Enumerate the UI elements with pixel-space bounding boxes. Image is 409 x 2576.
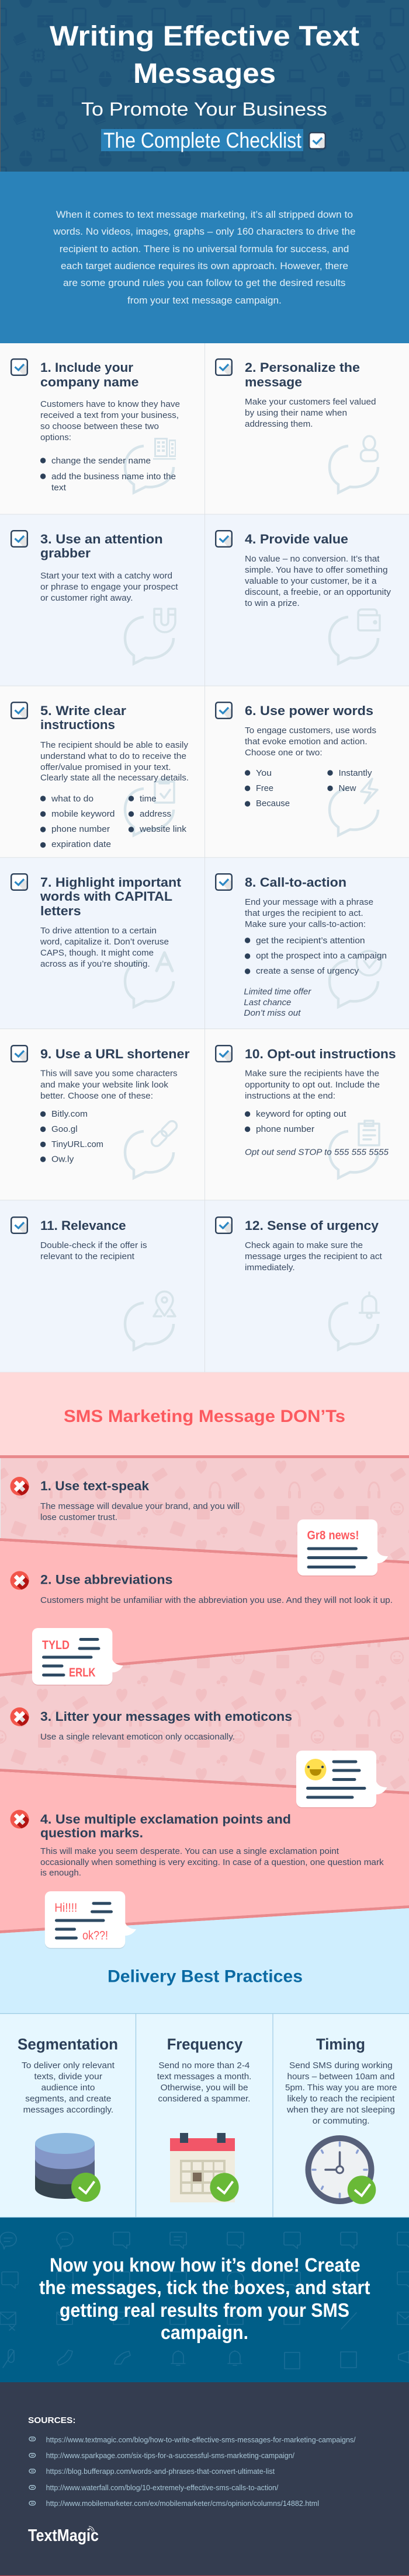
bullet list: You bbox=[256, 768, 272, 778]
icon: lightning bolt bbox=[361, 779, 377, 803]
body text: 5pm. This way you are more bbox=[285, 2083, 397, 2093]
body text: segments, and create bbox=[25, 2094, 111, 2104]
heading: 12. Sense of urgency bbox=[245, 1218, 379, 1233]
message bubble: abbreviations: TYLD bbox=[42, 1639, 70, 1652]
body text: Choose one or two: bbox=[245, 748, 323, 758]
don't 2: abbreviations bbox=[11, 1571, 393, 1686]
column: frequency bbox=[157, 2035, 251, 2202]
card 4: provide value bbox=[216, 531, 391, 664]
icon: red x bbox=[11, 1810, 29, 1828]
body text: relevant to the recipient bbox=[40, 1252, 135, 1261]
card 5: clear instructions bbox=[11, 702, 189, 849]
heading: 2. Use abbreviations bbox=[40, 1573, 173, 1587]
body text: occasionally when something is very exciting. In case of a question, one question mark bbox=[40, 1857, 384, 1867]
body text bbox=[285, 2061, 397, 2126]
panel: delivery best practices bbox=[0, 1891, 409, 2217]
body text: opportunity to opt out. Include the bbox=[245, 1080, 380, 1090]
body text: texts, divide your bbox=[34, 2072, 102, 2082]
bullet list: time bbox=[140, 794, 157, 804]
card 9: url shortener bbox=[11, 1045, 190, 1178]
bullet list: Instantly bbox=[339, 768, 372, 778]
bullet list: Free bbox=[256, 783, 273, 793]
bullet list bbox=[40, 456, 176, 493]
body text: Send SMS during working bbox=[289, 2061, 393, 2070]
bullet list: what to do bbox=[51, 794, 93, 804]
italic examples bbox=[244, 987, 311, 1018]
icon: checkbox bbox=[11, 359, 27, 375]
panel: introduction: When it comes to text message marketing, it’s all stripped down to bbox=[56, 209, 353, 220]
bullet list: Bitly.com bbox=[51, 1109, 88, 1119]
heading: question marks. bbox=[40, 1826, 143, 1840]
bullet list bbox=[40, 1109, 103, 1164]
bullet list: phone number bbox=[256, 1124, 314, 1134]
closing statement: campaign. bbox=[161, 2321, 248, 2343]
heading: 11. Relevance bbox=[40, 1218, 126, 1233]
heading: 3. Use an attention bbox=[40, 532, 163, 546]
body text: or commuting. bbox=[313, 2116, 370, 2126]
heading: words with CAPITAL bbox=[40, 889, 172, 904]
body text: word, capitalize it. Don’t overuse bbox=[40, 937, 169, 947]
sources list: https://blog.bufferapp.com/words-and-phrases-that-convert-ultimate-list bbox=[46, 2467, 275, 2476]
icon: checkbox bbox=[11, 1217, 27, 1233]
icon: checkbox bbox=[11, 1045, 27, 1062]
body text: instructions at the end: bbox=[245, 1091, 335, 1101]
card 3: attention grabber bbox=[11, 531, 178, 664]
icon: red x bbox=[11, 1707, 29, 1726]
sources list: http://www.waterfall.com/blog/10-extremely-effective-sms-calls-to-action/ bbox=[46, 2483, 279, 2492]
column: timing bbox=[285, 2035, 397, 2204]
heading: 4. Use multiple exclamation points and bbox=[40, 1812, 291, 1826]
bullet list: text bbox=[51, 483, 67, 493]
body text: hours – between 10am and bbox=[287, 2072, 395, 2082]
body text: lose customer trust. bbox=[40, 1512, 117, 1522]
panel: introduction: from your text message campaign. bbox=[127, 295, 282, 306]
icon: database bbox=[35, 2133, 100, 2202]
bullet list: change the sender name bbox=[51, 456, 151, 466]
heading bbox=[40, 532, 163, 560]
body text: message urges the recipient to act bbox=[245, 1252, 383, 1261]
bullet list bbox=[245, 768, 372, 808]
sources list: http://www.sparkpage.com/six-tips-for-a-successful-sms-marketing-campaign/ bbox=[46, 2451, 294, 2460]
body text: Make sure the recipients have the bbox=[245, 1068, 379, 1079]
body text bbox=[40, 740, 189, 783]
body text: valuable to your customer, be it a bbox=[245, 576, 377, 586]
icon: clipboard check bbox=[155, 779, 174, 803]
icon: checkbox bbox=[216, 874, 232, 890]
icon: smiley bbox=[305, 1759, 326, 1780]
icon: checkbox bbox=[216, 531, 232, 547]
body text: or customer right away. bbox=[40, 593, 133, 603]
body text: discount, a freebie, or an opportunity bbox=[245, 587, 391, 597]
bullet list: opt the prospect into a campaign bbox=[256, 951, 387, 961]
body text bbox=[40, 1240, 147, 1261]
bullet list: add the business name into the bbox=[51, 472, 176, 482]
closing statement: the messages, tick the boxes, and start bbox=[39, 2277, 370, 2298]
body text: Make sure your calls-to-action: bbox=[245, 919, 366, 929]
body text bbox=[40, 926, 169, 969]
body text: The recipient should be able to easily bbox=[40, 740, 189, 750]
heading: company name bbox=[40, 375, 139, 389]
body text: Start your text with a catchy word bbox=[40, 571, 172, 581]
card 1: include company name bbox=[11, 359, 180, 493]
body text bbox=[245, 726, 376, 758]
title: Messages bbox=[133, 58, 276, 89]
icon: building bbox=[153, 438, 176, 460]
icon: wallet bbox=[358, 609, 380, 630]
body text: To drive attention to a certain bbox=[40, 926, 157, 936]
italic examples: Last chance bbox=[244, 998, 291, 1008]
heading: 7. Highlight important bbox=[40, 875, 182, 890]
body text: and make your website link look bbox=[40, 1080, 169, 1090]
icon: map pin bbox=[154, 1291, 175, 1316]
icon: link bbox=[150, 1119, 179, 1148]
panel: SMS don'ts bbox=[0, 1372, 409, 1933]
don't 4: exclamation points bbox=[11, 1810, 384, 1878]
heading bbox=[40, 875, 182, 918]
panel: footer bbox=[0, 2382, 409, 2576]
body text: Double-check if the offer is bbox=[40, 1240, 147, 1250]
body text: considered a spammer. bbox=[158, 2094, 250, 2104]
panel: introduction: are some ground rules you can follow to get the desired results bbox=[63, 277, 346, 288]
panel: header bbox=[0, 0, 409, 172]
body text: likely to reach the recipient bbox=[287, 2094, 395, 2104]
body text: text messages a month. bbox=[157, 2072, 251, 2082]
icon: checkbox bbox=[11, 531, 27, 547]
title bbox=[50, 21, 359, 89]
bullet list: TinyURL.com bbox=[51, 1139, 103, 1149]
bullet list: expiration date bbox=[51, 839, 111, 849]
body text: understand what to do to receive the bbox=[40, 751, 186, 761]
closing statement: Now you know how it’s done! Create bbox=[50, 2254, 361, 2276]
body text: to win a prize. bbox=[245, 598, 300, 608]
body text: across as if you’re shouting. bbox=[40, 959, 150, 969]
body text: Otherwise, you will be bbox=[161, 2083, 248, 2093]
card 12: urgency bbox=[216, 1217, 383, 1350]
heading: 3. Litter your messages with emoticons bbox=[40, 1709, 292, 1724]
heading: delivery: Delivery Best Practices bbox=[108, 1967, 303, 1986]
background pattern row 2 bbox=[2, 2272, 409, 2289]
body text: End your message with a phrase bbox=[245, 897, 373, 907]
body text: immediately. bbox=[245, 1263, 295, 1273]
body text bbox=[40, 399, 180, 442]
body text: No value – no conversion. It’s that bbox=[245, 554, 380, 564]
message bubble: abbreviations: ERLK bbox=[69, 1666, 96, 1679]
column: segmentation bbox=[18, 2035, 118, 2202]
column: timing: Timing bbox=[316, 2035, 365, 2053]
heading: 10. Opt-out instructions bbox=[245, 1047, 396, 1061]
bullet list: Ow.ly bbox=[51, 1155, 74, 1164]
body text: offer/value promised in your text. bbox=[40, 762, 171, 772]
card 8: call-to-action bbox=[216, 874, 387, 1018]
checklist banner: The Complete Checklist bbox=[103, 128, 302, 152]
body text: CAPS, though. It might come bbox=[40, 948, 154, 958]
icon: magnet bbox=[154, 609, 175, 632]
message bubble: exclamation: Hi!!!! bbox=[54, 1901, 77, 1915]
bullet list bbox=[40, 794, 187, 849]
icon: red x bbox=[11, 1477, 29, 1496]
background pattern row 1 bbox=[0, 2232, 409, 2249]
message bubble: exclamation: ok??! bbox=[82, 1929, 108, 1943]
message bubble: abbreviations bbox=[32, 1628, 123, 1686]
card 6: power words bbox=[216, 702, 378, 835]
body text bbox=[40, 1068, 178, 1101]
body text: received a text from your business, bbox=[40, 410, 179, 420]
body text: that urges the recipient to act. bbox=[245, 908, 363, 918]
bullet list: address bbox=[140, 809, 171, 819]
heading bbox=[40, 360, 139, 389]
card 7: capital letters bbox=[11, 874, 182, 1007]
body text: messages accordingly. bbox=[23, 2105, 113, 2115]
body text: better. Choose one of these: bbox=[40, 1091, 153, 1101]
bullet list: website link bbox=[139, 824, 187, 834]
heading: 9. Use a URL shortener bbox=[40, 1047, 190, 1061]
icon: bell bbox=[360, 1292, 379, 1318]
heading: 1. Use text-speak bbox=[40, 1479, 149, 1493]
body text: so choose between these two bbox=[40, 421, 159, 431]
body text bbox=[245, 897, 373, 929]
icon: checkbox bbox=[11, 702, 27, 719]
bullet list bbox=[245, 1109, 346, 1134]
icon: link bullets bbox=[29, 2437, 35, 2505]
heading: 1. Include your bbox=[40, 360, 133, 375]
sources list: https://www.textmagic.com/blog/how-to-write-effective-sms-messages-for-marketing-campaigns/ bbox=[46, 2435, 356, 2444]
body text: Use a single relevant emoticon only occasionally. bbox=[40, 1732, 235, 1742]
heading: letters bbox=[40, 904, 81, 918]
body text: Check again to make sure the bbox=[245, 1240, 363, 1250]
body text bbox=[40, 1501, 240, 1522]
body text bbox=[40, 571, 178, 603]
panel: introduction bbox=[0, 172, 409, 343]
heading: don'ts: SMS Marketing Message DON’Ts bbox=[64, 1407, 345, 1426]
body text: Clearly state all the necessary details. bbox=[40, 773, 189, 783]
heading: 6. Use power words bbox=[245, 703, 373, 718]
body text bbox=[40, 1846, 384, 1878]
body text: Customers have to know they have bbox=[40, 399, 180, 409]
italic examples: Limited time offer bbox=[244, 987, 311, 997]
closing statement bbox=[39, 2254, 370, 2343]
icon: calendar bbox=[170, 2133, 239, 2202]
heading: 2. Personalize the bbox=[245, 360, 360, 375]
don't 1: text-speak bbox=[11, 1477, 388, 1576]
bullet list: mobile keyword bbox=[51, 809, 115, 819]
italic examples: Don’t miss out bbox=[244, 1008, 301, 1018]
icon: checkbox bbox=[216, 359, 232, 375]
panel: introduction: each target audience requires its own approach. However, there bbox=[61, 260, 348, 271]
background pattern row 3 bbox=[0, 2312, 409, 2330]
body text bbox=[157, 2061, 251, 2104]
icon: header checkbox bbox=[309, 133, 325, 149]
icon: checkbox bbox=[216, 1217, 232, 1233]
card 10: opt-out bbox=[216, 1045, 396, 1178]
message bubble: exclamation bbox=[45, 1891, 136, 1948]
heading bbox=[40, 1812, 291, 1840]
bullet list: keyword for opting out bbox=[256, 1109, 346, 1119]
logo: TextMagic: TextMagic bbox=[28, 2526, 99, 2545]
icon: checkbox bbox=[216, 1045, 232, 1062]
bullet list bbox=[245, 936, 387, 976]
heading bbox=[245, 360, 360, 389]
subtitle: To Promote Your Business bbox=[81, 99, 327, 120]
body text: when they are not sleeping bbox=[286, 2105, 395, 2115]
bullet list: phone number bbox=[51, 824, 110, 834]
sources list: http://www.mobilemarketer.com/ex/mobilemarketer/cms/opinion/columns/14882.html bbox=[46, 2499, 319, 2508]
heading: 8. Call-to-action bbox=[245, 875, 346, 890]
body text bbox=[22, 2061, 115, 2115]
message bubble: Gr8 news bbox=[297, 1519, 388, 1576]
body text bbox=[245, 1240, 383, 1273]
body text: or phrase to engage your prospect bbox=[40, 582, 178, 592]
body text: audience into bbox=[41, 2083, 95, 2093]
heading: 4. Provide value bbox=[245, 532, 348, 546]
message bubble: Gr8 news: Gr8 news! bbox=[307, 1529, 359, 1542]
heading: instructions bbox=[40, 717, 115, 732]
body text bbox=[245, 397, 376, 429]
background pattern row 4 bbox=[3, 2350, 409, 2369]
closing statement: getting real results from your SMS bbox=[60, 2299, 349, 2321]
don't 3: emoticons bbox=[11, 1707, 387, 1808]
bullet list: New bbox=[339, 783, 356, 793]
panel: introduction: words. No videos, images, graphs – only 160 characters to drive the bbox=[53, 226, 355, 237]
panel: checklist grid bbox=[0, 343, 409, 1372]
body text: simple. You have to offer something bbox=[245, 565, 388, 575]
icon: clipboard bbox=[359, 1121, 379, 1145]
heading: grabber bbox=[40, 546, 91, 560]
icon: checkbox bbox=[216, 702, 232, 719]
icon: red x bbox=[11, 1571, 29, 1590]
body text: by using their name when bbox=[245, 408, 347, 418]
bullet list: create a sense of urgency bbox=[256, 966, 359, 976]
heading bbox=[40, 703, 126, 732]
sources list bbox=[46, 2435, 356, 2508]
icon: person bbox=[361, 436, 377, 461]
icon: circle check bbox=[356, 951, 381, 975]
card 11: relevance bbox=[11, 1217, 175, 1350]
panel: call to action bbox=[0, 2218, 409, 2382]
body text: addressing them. bbox=[245, 419, 313, 429]
body text: This will make you seem desperate. You can use a single exclamation point bbox=[40, 1846, 339, 1856]
bullet list: Goo.gl bbox=[51, 1124, 78, 1134]
icon: letter A bbox=[157, 953, 172, 971]
body text: that evoke emotion and action. bbox=[245, 737, 368, 747]
card 2: personalize bbox=[216, 359, 378, 493]
title: Writing Effective Text bbox=[50, 21, 359, 52]
column: frequency: Frequency bbox=[167, 2035, 242, 2053]
heading: message bbox=[245, 375, 302, 389]
body text: To deliver only relevant bbox=[22, 2061, 115, 2070]
body text: options: bbox=[40, 433, 71, 442]
icon: clock bbox=[309, 2138, 376, 2204]
body text: This will save you some characters bbox=[40, 1068, 178, 1079]
body text: Customers might be unfamiliar with the abbreviation you use. And they will not look it up. bbox=[40, 1595, 393, 1605]
sources heading: SOURCES: bbox=[28, 2416, 76, 2425]
body text: The message will devalue your brand, and you will bbox=[40, 1501, 240, 1511]
message bubble: emoticon bbox=[296, 1751, 387, 1808]
body text: Send no more than 2-4 bbox=[158, 2061, 249, 2070]
body text: To engage customers, use words bbox=[245, 726, 376, 735]
body text bbox=[245, 1068, 380, 1101]
panel: introduction: recipient to action. There is no universal formula for success, and bbox=[60, 243, 349, 255]
body text: Make your customers feel valued bbox=[245, 397, 376, 407]
heading: 5. Write clear bbox=[40, 703, 126, 718]
icon: checkbox bbox=[11, 874, 27, 890]
body text: is enough. bbox=[40, 1868, 81, 1878]
italic example: Opt out send STOP to 555 555 5555 bbox=[245, 1148, 389, 1157]
column: segmentation: Segmentation bbox=[18, 2035, 118, 2053]
bullet list: Because bbox=[256, 799, 290, 808]
body text bbox=[245, 554, 391, 608]
bullet list: get the recipient’s attention bbox=[256, 936, 365, 946]
